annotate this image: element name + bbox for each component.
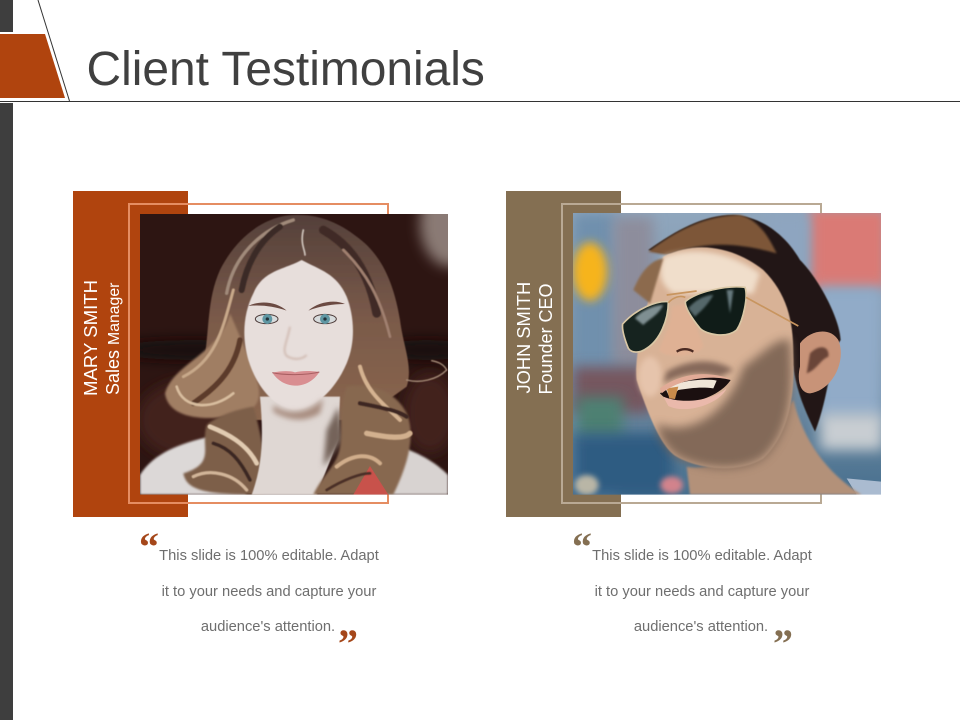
- outline frame: [129, 204, 388, 503]
- closing quote mark: ”: [338, 621, 358, 666]
- mouth: [660, 378, 731, 403]
- sunglasses: [622, 302, 668, 352]
- outline frame: [562, 204, 821, 503]
- name band: [73, 191, 188, 517]
- panel: Mary Smith quote: [139, 524, 379, 666]
- left curl: [165, 313, 259, 418]
- photo: woman: [140, 214, 448, 495]
- name label: MARY SMITH: [80, 280, 101, 396]
- role label: Founder CEO: [536, 283, 556, 394]
- quote text: it to your needs and capture your: [595, 584, 809, 600]
- neck and chest: [252, 397, 340, 495]
- lower right curl: [313, 386, 411, 495]
- brows: [248, 302, 287, 311]
- photo: man: [573, 210, 885, 497]
- header accent shape: [0, 34, 65, 98]
- name label: JOHN SMITH: [513, 282, 534, 394]
- panel: Mary Smith testimonial: [73, 191, 448, 517]
- shirt: [847, 478, 881, 495]
- hair: [648, 215, 841, 432]
- opening quote mark: “: [572, 524, 592, 569]
- opening quote mark: “: [139, 524, 159, 569]
- quote text: audience's attention.: [201, 619, 335, 635]
- quote text: audience's attention.: [634, 619, 768, 635]
- closing quote mark: ”: [773, 621, 793, 666]
- role label: Sales Manager: [103, 283, 123, 395]
- quote text: it to your needs and capture your: [162, 584, 376, 600]
- quote text: This slide is 100% editable. Adapt: [592, 548, 812, 564]
- quote text: [592, 548, 812, 635]
- face: [244, 260, 353, 410]
- neck: [687, 400, 862, 495]
- panel: John Smith testimonial: [506, 191, 885, 517]
- header rule lines: [0, 0, 960, 102]
- hair strands: [177, 220, 447, 490]
- eyes: [255, 314, 278, 324]
- shoulders: [140, 437, 247, 495]
- name band: [506, 191, 621, 517]
- lower left curl: [183, 407, 265, 495]
- nose: [659, 303, 703, 356]
- quote text: This slide is 100% editable. Adapt: [159, 548, 379, 564]
- panel: John Smith quote: [572, 524, 812, 666]
- stubble: [657, 340, 792, 468]
- hair dome: [203, 215, 409, 420]
- left rail: [0, 0, 13, 720]
- quote text: [159, 548, 379, 635]
- title: Client Testimonials: [86, 43, 485, 96]
- lips: [272, 371, 319, 386]
- ear: [799, 332, 841, 393]
- face: [636, 247, 794, 468]
